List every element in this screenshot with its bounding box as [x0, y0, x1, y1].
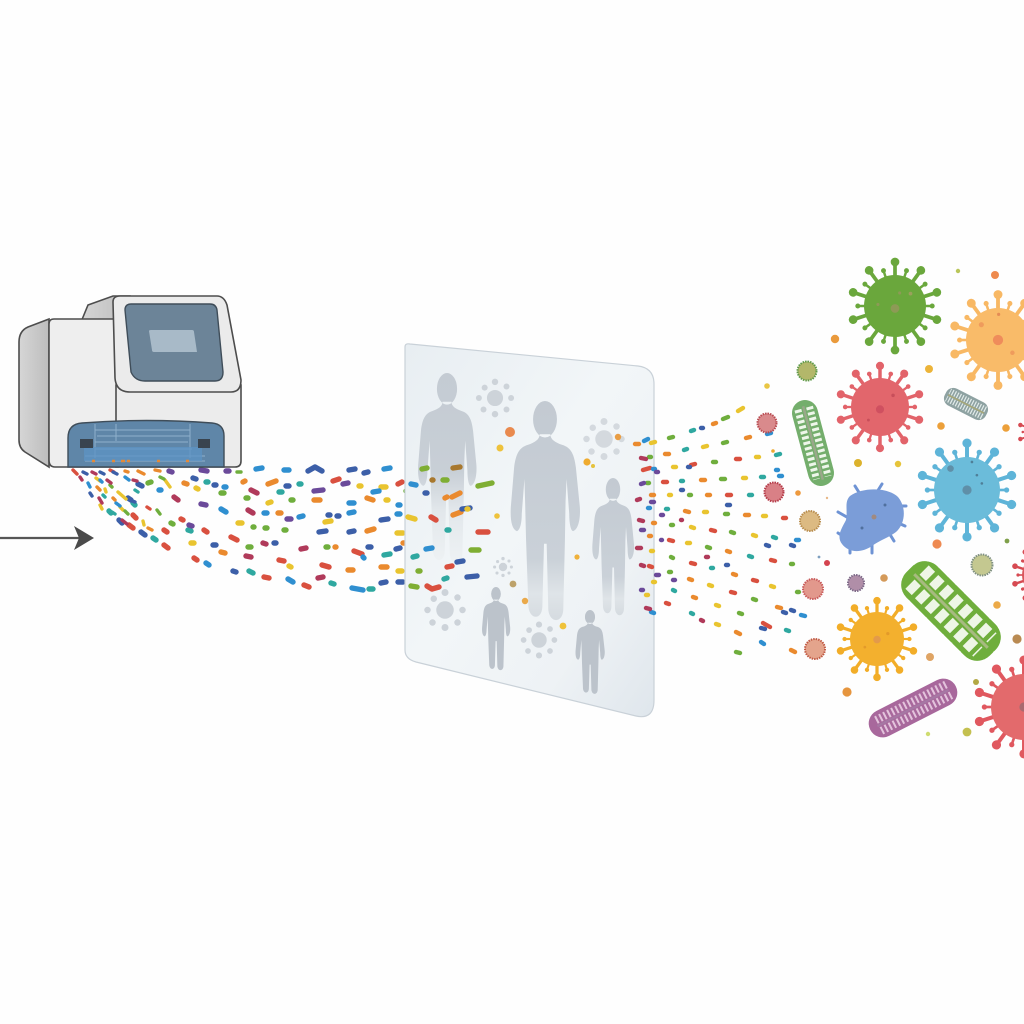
virus: partial red upper right [1016, 407, 1024, 457]
microbe cluster [476, 379, 514, 417]
arrow [0, 526, 94, 550]
microbes [758, 258, 1024, 758]
bacterium: green large [897, 557, 1005, 665]
virus: orange [946, 290, 1024, 390]
machine: lower body [116, 385, 241, 467]
stream of reads: left of panel [73, 467, 411, 590]
sequencing machine [19, 296, 241, 467]
floating dots [764, 269, 1022, 736]
person: large adult left [418, 373, 477, 563]
microbe ring [583, 418, 625, 460]
small spheres [758, 362, 992, 659]
stream of reads: right of panel [635, 408, 805, 653]
bacterium: grey [941, 385, 991, 423]
machine: rear housing [81, 296, 130, 330]
reads passing through panel [408, 467, 492, 589]
virus: red bottom right [970, 656, 1024, 758]
machine: screen [125, 304, 223, 381]
person: adult right [592, 478, 634, 615]
coloured specks on panel [494, 427, 621, 629]
glass panel with people [405, 344, 654, 717]
machine: screen highlight [149, 330, 197, 352]
machine: upper housing [113, 296, 241, 392]
virus: red [833, 362, 927, 452]
panel: glass sheet [405, 344, 654, 717]
bacterium: green upper [789, 397, 837, 489]
person: small figure right [576, 610, 605, 694]
person: large adult centre [511, 401, 580, 620]
microbe cluster small [493, 557, 513, 577]
virus: yellow [833, 597, 921, 681]
machine: front block [49, 319, 118, 467]
microbe cluster lower centre [521, 622, 557, 658]
bacterium: purple [864, 674, 962, 742]
person: small figure [482, 587, 510, 670]
virus: partial red right [1009, 544, 1024, 606]
microbe cluster lower left [424, 589, 466, 631]
machine: left side face [19, 319, 49, 467]
virus: green [844, 258, 946, 354]
machine: flow cell tray [68, 420, 224, 467]
virus: periwinkle irregular [838, 484, 906, 553]
virus: blue [913, 439, 1021, 541]
